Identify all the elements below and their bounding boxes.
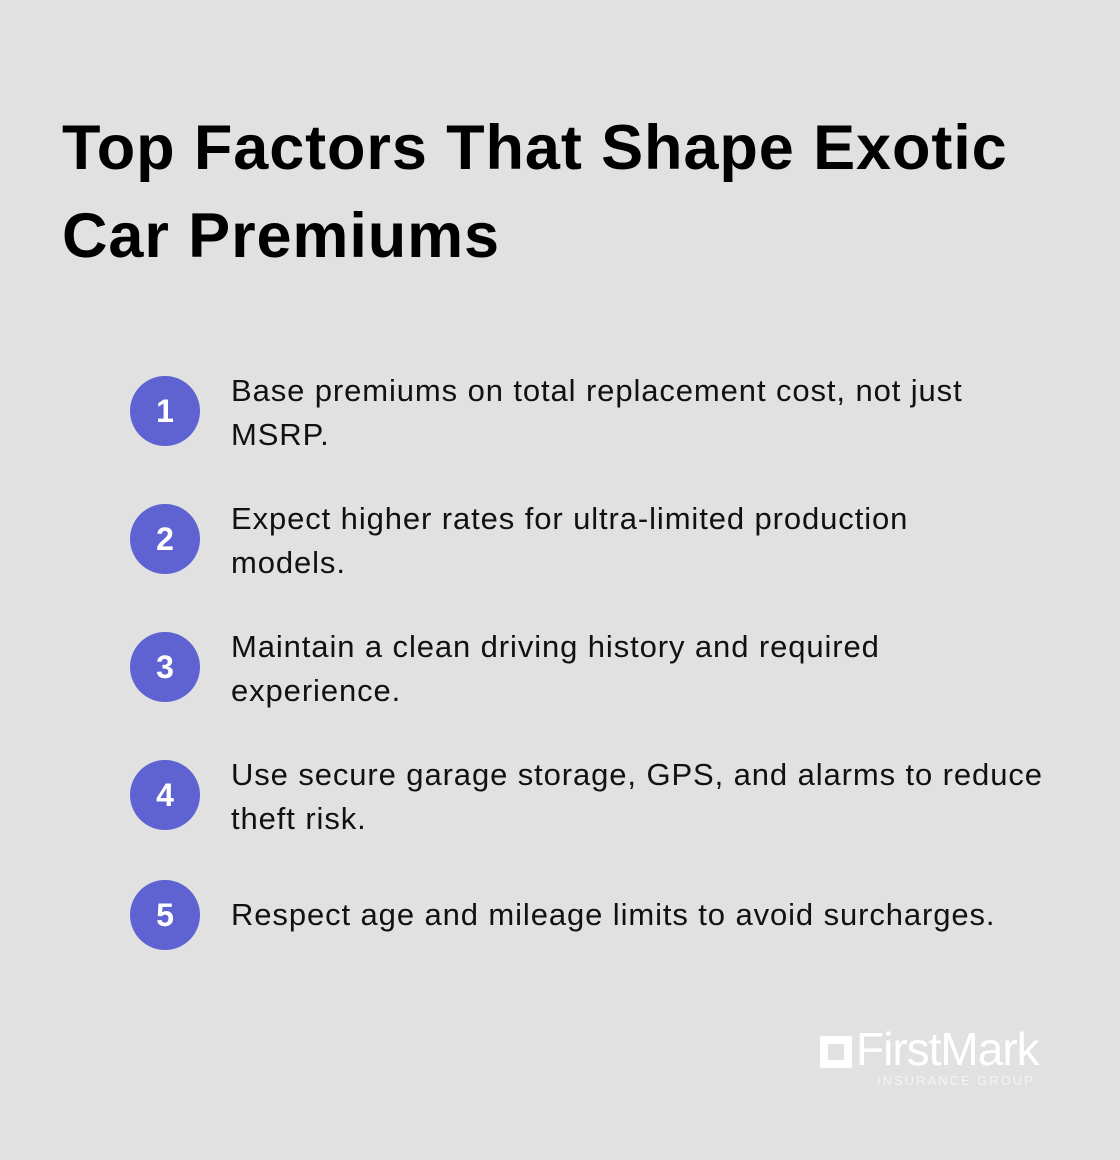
item 4: theft risk. (231, 801, 367, 836)
title (62, 113, 1008, 271)
circle 1: 1 (156, 393, 174, 429)
circle 4 (130, 760, 200, 830)
item 2: Expect higher rates for ultra-limited production (231, 501, 908, 536)
circle 3 (130, 632, 200, 702)
item 5: Respect age and mileage limits to avoid surcharges. (231, 897, 995, 932)
circle 5 (130, 880, 200, 950)
circle 1 (130, 376, 200, 446)
item 2: models. (231, 545, 346, 580)
item 1 (130, 373, 963, 452)
item 1: MSRP. (231, 417, 330, 452)
item 5 (130, 880, 995, 950)
circle 3: 3 (156, 649, 174, 685)
item 3: experience. (231, 673, 401, 708)
item 2 (130, 501, 908, 580)
title: Car Premiums (62, 201, 500, 271)
circle 4: 4 (156, 777, 174, 813)
item 4 (130, 757, 1043, 836)
title: Top Factors That Shape Exotic (62, 113, 1008, 183)
circle 2 (130, 504, 200, 574)
logo: INSURANCE GROUP (877, 1073, 1035, 1088)
item 4: Use secure garage storage, GPS, and alarms to reduce (231, 757, 1043, 792)
logo (820, 1023, 1040, 1088)
item 1: Base premiums on total replacement cost, not just (231, 373, 963, 408)
item 3: Maintain a clean driving history and required (231, 629, 880, 664)
logo: FirstMark (856, 1023, 1039, 1075)
circle 2: 2 (156, 521, 174, 557)
item 3 (130, 629, 880, 708)
circle 5: 5 (156, 897, 174, 933)
